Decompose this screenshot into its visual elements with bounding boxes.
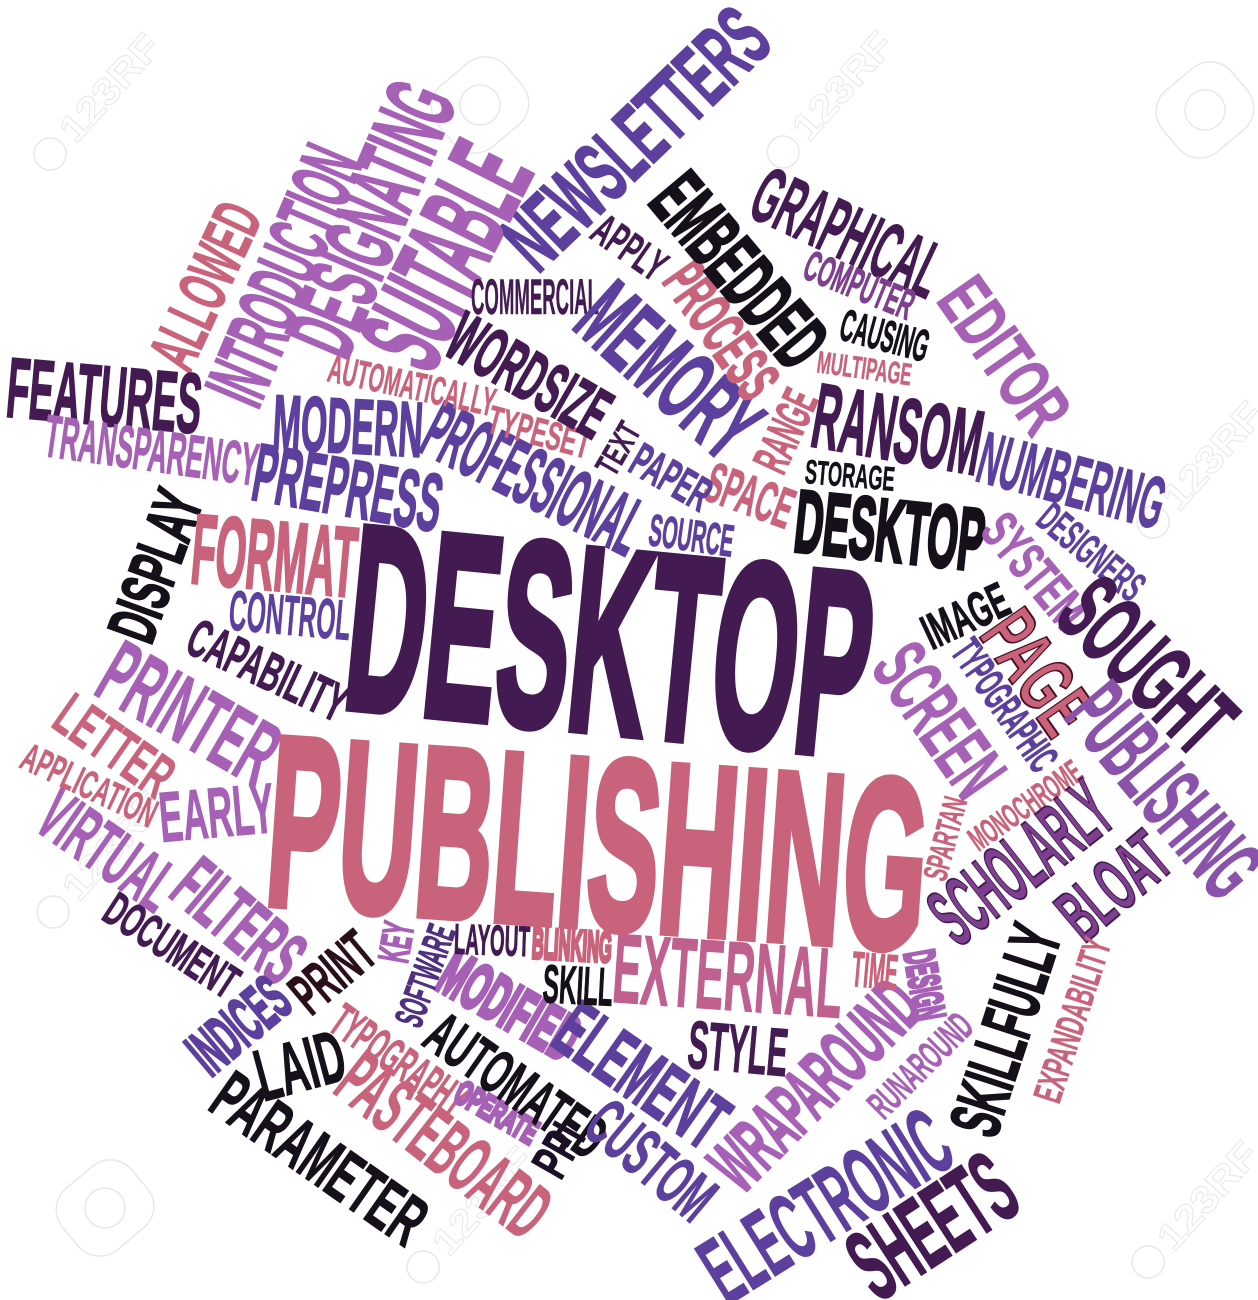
text: STYLE — [685, 1007, 791, 1091]
word: SKILLFULLY: SKILLFULLY — [935, 916, 1077, 1145]
word: PAGE: PAGE — [964, 594, 1111, 751]
text: FORMAT — [187, 493, 361, 618]
text: TIME — [850, 941, 900, 1001]
word: EARLY: EARLY — [156, 769, 277, 858]
word: MONOCHROME: MONOCHROME — [961, 753, 1090, 859]
text: EXTERNAL — [609, 912, 847, 1039]
word: SYSTEM: SYSTEM — [969, 502, 1099, 640]
word: DISPLAY: DISPLAY — [94, 480, 218, 652]
text: GRAPHICAL — [738, 150, 957, 315]
word: EDITOR: EDITOR — [922, 262, 1087, 449]
word: EXPANDABILITY: EXPANDABILITY — [1026, 933, 1120, 1108]
text: TRANSPARENCY — [40, 402, 263, 499]
word: IMAGE: IMAGE — [913, 572, 1018, 660]
word: SPACE: SPACE — [696, 450, 803, 541]
text: DESIGN — [894, 947, 954, 1024]
word: LAID: LAID — [246, 1014, 354, 1117]
word: ALLOWED: ALLOWED — [134, 191, 277, 381]
word: COMPUTER: COMPUTER — [797, 242, 921, 330]
word: FILTERS: FILTERS — [156, 841, 323, 1001]
word: APPLY: APPLY — [582, 204, 677, 291]
word: DOCUMENT: DOCUMENT — [94, 883, 249, 1009]
watermarks: 123RF stamps: 123RF — [784, 24, 903, 149]
text: COMMERCIAL — [471, 269, 599, 325]
word: TYPOGRAPHY: TYPOGRAPHY — [320, 995, 477, 1127]
watermarks: 123RF stamps: 123RF — [1149, 1134, 1258, 1259]
word: PPI: PPI — [521, 1113, 596, 1187]
text: SOFTWARE — [387, 919, 464, 1033]
word: SPARTAN: SPARTAN — [916, 793, 975, 885]
watermarks: 123RF stamps: 123RF — [51, 26, 170, 151]
word: MULTIPAGE: MULTIPAGE — [815, 344, 914, 392]
word: INDICES: INDICES — [173, 962, 304, 1089]
watermarks: 123RF stamps: 123RF — [424, 1139, 543, 1264]
word: KEY: KEY — [370, 918, 424, 966]
word: VIRTUAL: VIRTUAL — [22, 773, 193, 927]
word: AUTOMATICALLY: AUTOMATICALLY — [324, 347, 500, 425]
word: PAPER: PAPER — [621, 434, 721, 522]
text: RANSOM — [805, 365, 990, 495]
word: PROCESS: PROCESS — [649, 250, 792, 412]
word: OPERATE: OPERATE — [448, 1074, 545, 1152]
text: CONTROL — [226, 579, 353, 653]
word: APPLICATION: APPLICATION — [14, 735, 164, 836]
word: PRINT: PRINT — [276, 918, 388, 1027]
word: TEXT: TEXT — [588, 415, 649, 482]
text: BLINKING — [531, 920, 613, 972]
word: WRAPAROUND: WRAPAROUND — [692, 962, 938, 1208]
text: SOURCE — [646, 504, 737, 567]
word: LETTER: LETTER — [41, 681, 187, 812]
word: CAPABILITY: CAPABILITY — [178, 608, 357, 734]
word: DESIGNERS: DESIGNERS — [1028, 494, 1154, 611]
text: DESKTOP — [790, 471, 990, 590]
word: RUNAROUND: RUNAROUND — [859, 1004, 982, 1127]
word: MEMORY: MEMORY — [556, 260, 783, 481]
word: EMBEDDED: EMBEDDED — [634, 156, 846, 385]
word: TYPESET: TYPESET — [483, 398, 596, 468]
text: SKILL — [541, 954, 614, 1018]
word: SCREEN: SCREEN — [856, 627, 1023, 813]
text: FEATURES — [3, 341, 206, 452]
word: WORDSIZE: WORDSIZE — [433, 298, 624, 454]
word: PRINTER: PRINTER — [81, 622, 297, 805]
text: PREPRESS — [246, 427, 449, 550]
word: AUTOMATED: AUTOMATED — [412, 999, 619, 1173]
word: MODIFIED: MODIFIED — [427, 936, 593, 1075]
text: LAYOUT — [453, 916, 531, 966]
watermarks: 123RF stamps: 123RF — [54, 784, 173, 909]
text: CAUSING — [835, 299, 935, 372]
text: MODERN — [271, 378, 425, 474]
word: TYPOGRAPHIC: TYPOGRAPHIC — [942, 630, 1067, 781]
word: ELEMENT: ELEMENT — [538, 984, 745, 1166]
word: RANGE: RANGE — [742, 381, 829, 481]
text: PROFESSIONAL — [409, 385, 659, 573]
word: STORAGE: STORAGE — [803, 453, 896, 499]
